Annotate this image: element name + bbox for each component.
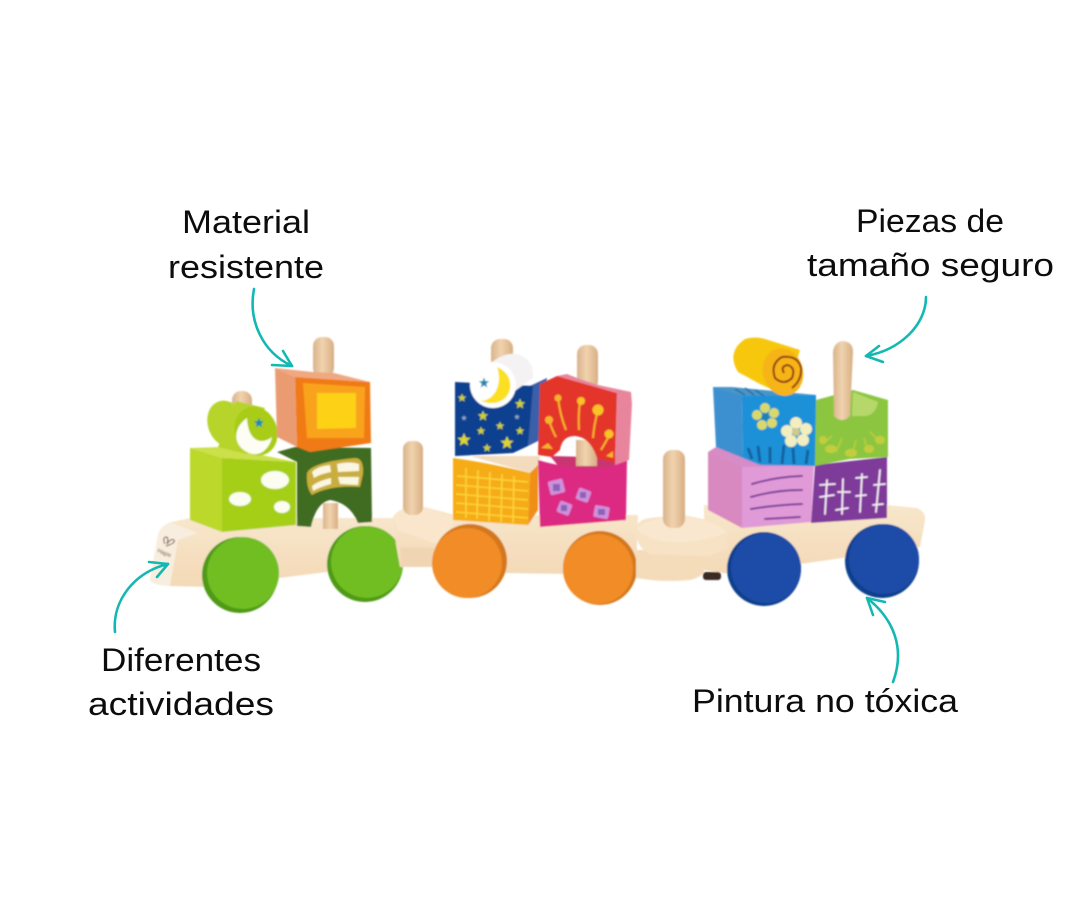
label: piezas de tamaño seguro: Piezas de	[856, 203, 1004, 239]
wagon 3 lower tab and axle	[636, 550, 721, 581]
orange block with awning	[275, 368, 371, 452]
wagon 3: blue wheels	[636, 338, 925, 606]
label: pintura no tóxica: Pintura no tóxica	[692, 683, 958, 719]
purple fence block	[811, 457, 887, 523]
green cube with clouds	[190, 447, 296, 532]
arrow: to material resistente	[253, 289, 292, 366]
magenta block with squares	[538, 456, 627, 527]
green sun block	[815, 390, 888, 466]
tall peg on green block	[833, 341, 853, 420]
connector disk top shading	[636, 516, 727, 542]
wagon 1 brand mark: Hape	[156, 548, 172, 559]
wagon 3 connector disk	[636, 515, 728, 556]
label: diferentes actividades: actividades	[88, 686, 274, 722]
label: piezas de tamaño seguro: tamaño seguro	[807, 247, 1054, 283]
moon cylinder	[200, 395, 285, 462]
toy train illustration	[150, 337, 925, 613]
peg behind red block	[577, 345, 598, 390]
wagon 2 wooden base	[393, 507, 638, 575]
wagon 1: green wheels	[150, 337, 405, 613]
blue wheel rear	[727, 532, 801, 606]
label: diferentes actividades	[88, 642, 274, 722]
lower peg in arch	[323, 503, 338, 529]
orange wheel front	[563, 531, 637, 605]
blue wheel front	[845, 524, 919, 598]
orange wheel rear	[432, 524, 507, 598]
wagon 3 wooden base	[704, 505, 925, 574]
yellow grid block	[453, 456, 540, 525]
lower peg through red arch	[576, 440, 597, 466]
green wheel front	[327, 526, 403, 602]
top peg	[313, 337, 334, 377]
dark green arch block with window	[277, 447, 372, 527]
peg on wagon 3	[663, 450, 685, 528]
wagon 1 brand mark	[156, 537, 174, 559]
white moon cylinder	[470, 354, 533, 408]
yellow spiral roll	[733, 338, 809, 400]
label: piezas de tamaño seguro	[807, 203, 1054, 283]
green wheel rear	[202, 537, 279, 613]
wagon 1 wooden base	[150, 518, 405, 587]
arrow: to piezas de tamaño seguro	[866, 297, 926, 362]
peg on wagon 2	[403, 441, 423, 515]
blue flower block	[713, 387, 816, 466]
blue star block	[455, 378, 547, 456]
peg behind moon cylinder	[232, 391, 252, 413]
label: material resistente	[168, 204, 324, 285]
wagon 2: orange wheels	[393, 339, 638, 605]
label: material resistente: Material	[182, 204, 310, 240]
red arch block	[538, 374, 632, 465]
lilac striped block	[708, 447, 816, 528]
arrow: to diferentes actividades	[115, 562, 168, 632]
peg behind moon block	[491, 339, 513, 369]
label: diferentes actividades: Diferentes	[101, 642, 261, 678]
arrow: to pintura no tóxica	[867, 598, 898, 682]
label: material resistente: resistente	[168, 249, 324, 285]
wagon 2 lower tab	[400, 547, 436, 567]
